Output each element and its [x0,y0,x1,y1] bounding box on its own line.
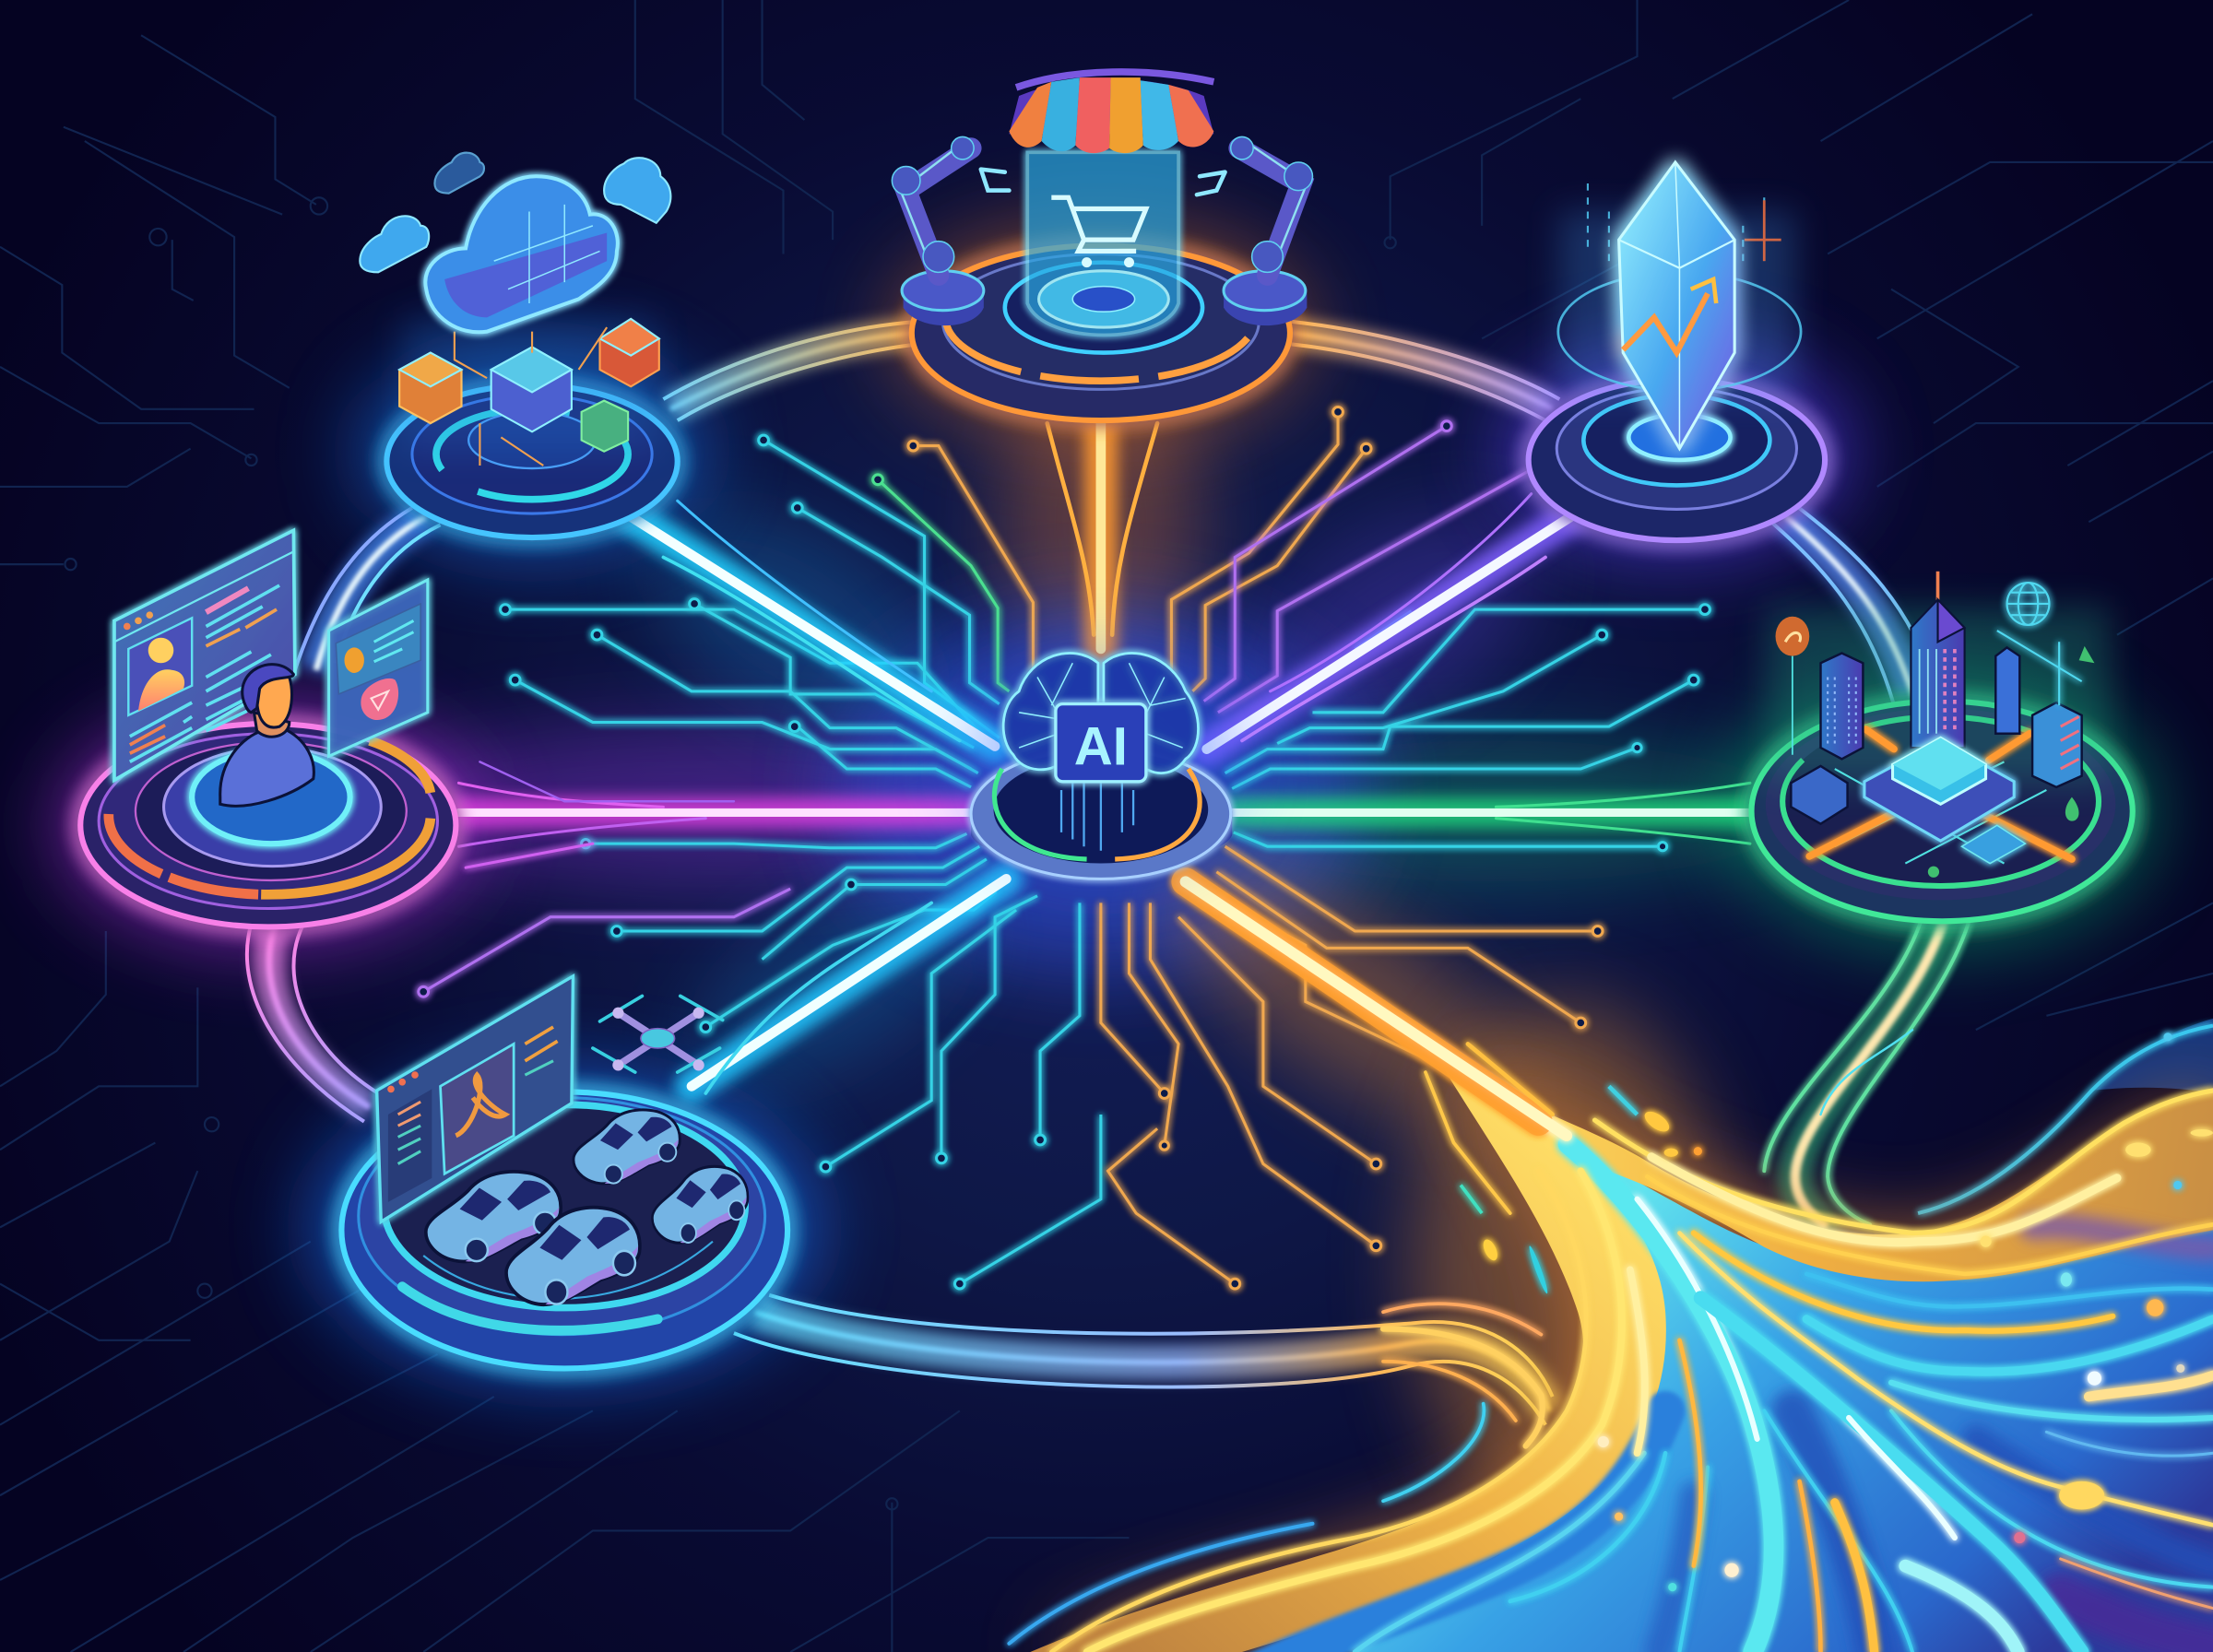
icon: robot arm right [1197,136,1312,325]
interior circuit traces: orange [908,407,1603,1289]
icon: side buildings [1791,647,2082,824]
spoke: hub to shop, orange [1047,423,1157,649]
icon: chip core [1864,738,2014,841]
spoke: hub to city, green [1228,783,1750,844]
data flow river [1009,881,2213,1652]
platform base [80,724,456,926]
hub base [971,811,1232,865]
orbit rings [1558,183,1801,391]
platform: crystal analytics [1529,162,1825,540]
interior circuit traces: cyan [501,435,1710,1289]
icon: glass cylinder with cart [1027,152,1178,335]
spoke: hub to user, magenta [458,761,981,867]
platform base [1751,702,2133,921]
icon: data cubes [399,319,659,466]
central AI hub [971,653,1232,879]
panel: profile window [114,530,295,780]
holographic glow column [1559,212,1795,395]
platform base [386,385,678,537]
city return tube [1764,917,1970,1224]
ring: user to cloud [293,508,441,674]
avatar card [128,618,192,715]
icon: glowing chip tile [1962,825,2025,864]
holographic glow column [1767,607,2110,783]
orange streets [1809,729,2072,859]
panel: vehicle dashboard [377,976,573,1221]
icon: central tower [1911,572,1965,748]
icon: robot arm left [892,136,1009,325]
flow: orange upper band [1468,1072,2213,1281]
flow: cyan strands [1510,1144,2213,1652]
ring: user to cars [247,924,378,1122]
ring: shop to crystal [1292,322,1559,420]
hub ring segments [994,769,1087,859]
spoke: hub to cars, cyan [692,879,1006,1093]
platform base [341,1092,787,1368]
platform: cloud services [360,153,678,537]
icon: leaf markers [1928,646,2094,878]
ambient glow haze [56,218,2154,1538]
panel: small app window [329,580,428,756]
icon: drip lines [1061,783,1133,851]
platform: smart city [1751,572,2133,921]
wave: upper-right cyan strand [1918,1019,2213,1213]
platform base [1529,380,1825,540]
flow: haze glow [1030,1072,2213,1652]
ring: cloud to shop [663,322,917,420]
icon: person bust [220,665,314,806]
ring: cars into flow [734,1295,1553,1425]
AI chip [1056,704,1146,782]
flow: amber left band [1030,1037,1666,1652]
spoke: hub to cloud, cyan [628,501,995,747]
platform: user personalisation [80,530,456,926]
interior circuit traces: purple and green [419,421,1538,997]
holographic column [402,317,657,452]
icon: brain [1003,653,1198,773]
flow: blue body [1355,1143,2213,1652]
icon: main cloud [425,176,618,332]
icon: awning [1009,72,1213,153]
platform: autonomous vehicles [341,976,787,1368]
icon: globe [1997,583,2082,705]
flow: deeper blue channels [1658,1226,2213,1652]
hub glow [974,663,1228,860]
label: AI: AI [1074,716,1128,776]
platform base [912,245,1290,420]
ring: crystal to city [1771,505,1936,705]
flow: sparks and droplets [1461,1032,2213,1591]
icon: drone [593,996,723,1072]
spoke: hub to crystal, violet [1207,494,1574,749]
icon: small clouds [360,153,670,272]
flow: yellow strands [1051,881,2213,1652]
flow: lower-left blue streams [1009,1410,1665,1652]
text lines [130,585,279,761]
icon: swirl badge [1776,617,1809,755]
street grid [1835,761,2046,864]
icon: cars [426,1110,748,1304]
icon: crystal with chart [1619,162,1734,449]
platform: retail shop [892,72,1312,420]
